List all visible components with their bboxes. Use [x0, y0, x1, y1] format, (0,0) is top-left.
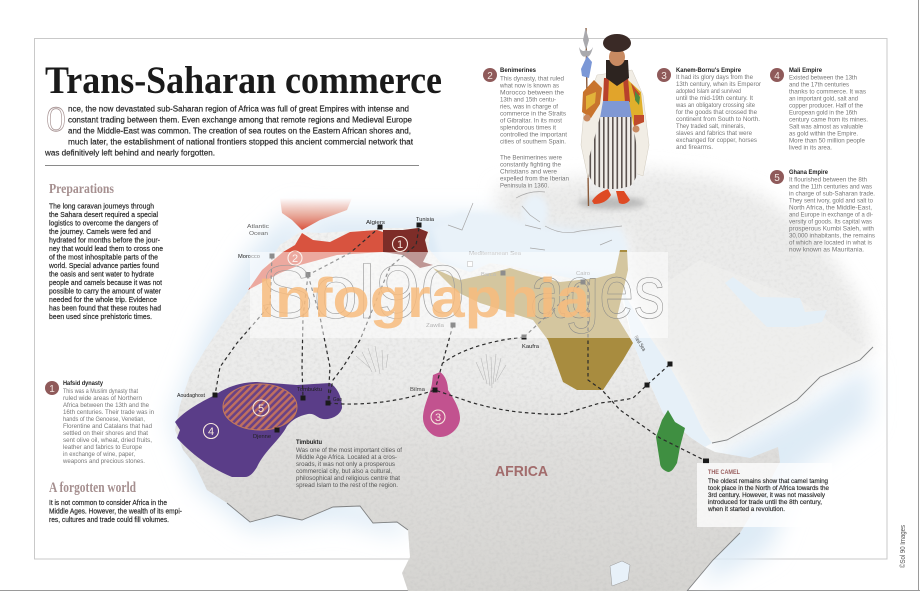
panel: preparations: world. Special advance parties found — [48, 261, 159, 270]
map labels: Morocco — [238, 254, 260, 260]
panel: Kanem-Bornu's Empire: slaves and fabrics that were — [676, 130, 753, 137]
panel: Benimerines: This dynasty, that ruled — [500, 75, 565, 82]
panel: Kanem-Bornu's Empire: continent from South to North. — [676, 116, 760, 123]
badge 1: 1 — [49, 384, 55, 395]
panel: Hafsid dynasty: weapons and precious stones. — [62, 458, 145, 465]
Spain in Benimerines territory — [280, 198, 352, 230]
panel: Timbuktu: Timbuktu — [296, 439, 322, 446]
panel: Benimerines: splendorous times it — [500, 124, 556, 131]
panel: Mali Empire: Salt was almost as valuable — [789, 124, 864, 130]
Persian Gulf — [725, 277, 827, 327]
panel: preparations — [48, 182, 163, 321]
continent label: AFRICA — [495, 463, 548, 480]
turban — [603, 34, 631, 52]
panel: Benimerines: Peninsula in 1360. — [500, 182, 549, 189]
panel: preparations: the Sahara desert required a special — [49, 210, 158, 219]
panel: Mali Empire: century came from its mines. — [789, 116, 868, 124]
map labels: Mediterranean Sea — [469, 251, 522, 257]
tassel — [581, 56, 592, 78]
intro paragraph: was definitively left behind and nearly forgotten. — [44, 148, 215, 158]
panel: Hafsid dynasty: This was a Muslim dynasty that — [63, 388, 138, 395]
panel: Ghana Empire: in charge of sub-Saharan trade. — [789, 191, 875, 198]
panel: Mali Empire: copper producer. Half of the — [789, 102, 864, 110]
panel: the camel: The oldest remains show that camel taming — [708, 478, 828, 485]
heading: A forgotten world — [49, 480, 136, 496]
panel: Mali Empire: More than 50 million people — [789, 138, 866, 144]
panel: the camel — [697, 463, 832, 527]
panel: Ghana Empire: and Europe in exchange of a di- — [789, 212, 873, 219]
Europe and Asia land — [497, 170, 873, 443]
panel: preparations: the journey. Camels were fed and — [49, 227, 151, 236]
panel: Benimerines: 13th and 15th centu- — [500, 96, 556, 103]
credit: ©Sol 90 Images — [899, 525, 907, 568]
panel: Ghana Empire: versity of goods. Its capital was — [789, 219, 872, 226]
panel: Hafsid dynasty: in exchange of wine, paper, — [63, 451, 135, 458]
panel: Hafsid dynasty: settled on their shores and that — [63, 430, 148, 437]
face — [609, 48, 625, 66]
sash — [600, 101, 632, 118]
Africa land — [175, 228, 780, 591]
panel: preparations: people and camels because it was not — [49, 278, 162, 287]
panel: Hafsid dynasty: Hafsid dynasty — [63, 380, 104, 387]
cloak — [581, 70, 649, 178]
panel: Kanem-Bornu's Empire: exchanged for copper, horses — [676, 137, 757, 144]
panel: Kanem-Bornu's Empire — [657, 67, 761, 151]
map of North Africa and Arabia — [170, 170, 873, 591]
map labels: Barca — [481, 272, 497, 278]
panel: Benimerines: Benimerines — [500, 67, 537, 74]
panel: a forgotten world: Middle Ages. However, the wealth of its empi- — [49, 506, 183, 516]
map labels: Atlantic — [247, 224, 269, 230]
panel: preparations: logistics to overcome the dangers of — [49, 218, 158, 228]
panel: Benimerines: what now is known as — [499, 82, 559, 89]
coastlines — [227, 347, 873, 591]
map number badges: 1 — [397, 239, 403, 251]
map labels: Aoudaghost — [177, 393, 205, 399]
panel: Hafsid dynasty: sent olive oil, wheat, dried fruits, — [63, 437, 152, 444]
hand right — [632, 126, 640, 132]
badge 2: 2 — [487, 71, 493, 82]
map labels: Bilma — [410, 387, 426, 393]
panel: Ghana Empire: and the 11th centuries and was — [789, 184, 872, 191]
drop cap: O — [46, 99, 66, 139]
region 6: Egypt tan area — [433, 250, 633, 390]
intro paragraph — [44, 99, 414, 158]
panel: the camel: when it started a revolution. — [707, 506, 785, 513]
panel: Timbuktu: Was one of the most important cities of — [296, 447, 402, 454]
watermark — [258, 250, 665, 334]
badge 4: 4 — [774, 71, 780, 82]
Arabia relief texture — [497, 170, 873, 443]
panel: Kanem-Bornu's Empire: Kanem-Bornu's Empire — [676, 67, 742, 74]
panel: Benimerines: controlled the important — [500, 131, 567, 138]
heading: Preparations — [49, 182, 114, 197]
map number badges — [204, 236, 445, 438]
striped trousers — [588, 117, 638, 189]
title: Trans-Saharan commerce — [45, 59, 442, 102]
panel: Ghana Empire: now known as Mauritania. — [789, 247, 864, 254]
panel: a forgotten world: It is not common to consider Africa in the — [49, 498, 167, 507]
panel: Benimerines: cities of southern Spain. — [500, 138, 566, 145]
intro paragraph: and the Middle-East was common. The creation of sea routes on the Eastern African shores and, — [68, 126, 411, 136]
ground shadow — [578, 197, 646, 209]
panel: preparations: needed for the whole trip. Evidence — [49, 295, 157, 304]
panel: Kanem-Bornu's Empire: and firearms. — [676, 144, 713, 151]
panel: preparations: of the most inhospitable parts of the — [49, 252, 158, 262]
watermark: Infographia — [258, 266, 591, 329]
panel: Mali Empire: Existed between the 13th — [789, 74, 858, 82]
map labels: Tombuktu — [297, 387, 322, 393]
region 3: Kanem-Bornu — [423, 372, 460, 437]
panel: Kanem-Bornu's Empire: It had its glory days from the — [676, 74, 754, 81]
panel: preparations: The long caravan journeys through — [49, 202, 154, 210]
Tibesti and Ahaggar relief — [356, 346, 506, 388]
panel: Timbuktu: sroads, it was not only a prosperous — [296, 461, 395, 468]
panel: Mali Empire: European gold in the 16th — [789, 110, 858, 116]
panel: a forgotten world — [49, 480, 183, 524]
badge 3: 3 — [661, 71, 667, 82]
Red Sea — [622, 290, 712, 447]
panel: Timbuktu: commercial city, but also a cultural, — [296, 468, 392, 475]
panel: Ghana Empire — [770, 169, 875, 254]
panel: Timbuktu: philosophical and religious centre that — [296, 475, 400, 482]
panel: Mali Empire: lived in its area. — [789, 144, 832, 152]
map labels — [177, 217, 647, 440]
panel: Kanem-Bornu's Empire: adopted Islam and survived — [676, 88, 741, 95]
panel: Ghana Empire: Ghana Empire — [789, 169, 829, 176]
panel: Benimerines: Morocco between the — [500, 89, 565, 96]
map labels: Cairo — [576, 271, 590, 277]
panel: preparations: been used since prehistoric times. — [49, 312, 152, 321]
intro paragraph: constant trading between them. Even exchange among that remote regions and Medieval Europe — [68, 116, 413, 124]
city markers — [212, 222, 709, 464]
panel: Hafsid dynasty — [45, 380, 155, 465]
panel: Benimerines: constantly fighting the — [500, 161, 562, 168]
panel: Kanem-Bornu's Empire: They traded salt, minerals, — [676, 123, 745, 130]
region 1: Hafsid dynasty — [383, 228, 433, 268]
map labels: Red Sea — [632, 335, 647, 353]
left sleeve — [582, 80, 602, 118]
panel: Timbuktu: spread Islam to the rest of the region. — [296, 482, 398, 489]
panel: Benimerines: expelled from the Iberian — [500, 175, 570, 182]
Mediterranean fringe — [432, 212, 628, 275]
Lake Victoria — [610, 561, 630, 586]
panel: Ghana Empire: 30,000 inhabitants, the remains — [789, 233, 875, 240]
shoes — [592, 189, 630, 204]
panel: Benimerines: commerce in the Straits — [500, 110, 566, 117]
panel: Hafsid dynasty: Florentine and Catalans that had — [63, 423, 153, 430]
map labels: Tunisia — [416, 217, 435, 223]
sea glow — [170, 205, 870, 585]
panel: Kanem-Bornu's Empire: until the mid-19th century. It — [676, 95, 753, 102]
Africa relief texture — [175, 228, 780, 591]
panel: Mali Empire: Mali Empire — [789, 67, 823, 74]
map labels: Algiers — [366, 220, 385, 226]
panel: preparations: has been found that these routes had — [49, 304, 161, 312]
panel: Hafsid dynasty: ruled wide areas of Northern — [63, 395, 143, 402]
panel: Benimerines: ries, was in charge of — [500, 103, 558, 110]
panel: Timbuktu — [296, 439, 402, 489]
right sleeve — [628, 80, 644, 126]
panel: Mali Empire: as gold within the Empire. — [789, 130, 858, 138]
region 4: Mali Empire — [175, 382, 342, 477]
trade routes — [215, 227, 706, 461]
panel: Hafsid dynasty: leather and fabrics to Europe — [63, 444, 143, 451]
panel: a forgotten world: res, cultures and trade could fill volumes. — [49, 515, 169, 524]
Arabia crisp fill — [640, 260, 860, 443]
map labels: Ocean — [249, 231, 268, 237]
hands — [584, 114, 590, 122]
panel: Benimerines: Christians and were — [500, 168, 558, 175]
panel: Hafsid dynasty: 16th centuries. Their trade was in — [63, 409, 155, 416]
figure: Saharan merchant — [578, 28, 649, 209]
Mediterranean coasts — [448, 192, 622, 250]
map number badges: 3 — [435, 412, 441, 424]
panel: Timbuktu: Middle Age Africa. Located at a cros- — [296, 454, 397, 461]
region 2: Benimerines — [248, 230, 383, 290]
panel: preparations: ney that would lead them to cross one — [49, 244, 163, 253]
region 5: Ghana Empire — [223, 384, 297, 430]
watermark: ages — [530, 250, 665, 334]
panel: the camel: 3rd century. However, it was not massively — [708, 492, 826, 499]
panel: the camel: took place in the North of Africa towards the — [708, 485, 829, 492]
region 7: Ethiopia — [656, 410, 685, 472]
intro paragraph: much later, the establishment of national frontiers stopped this ancient commercial network that — [68, 138, 414, 146]
map number badges: 5 — [258, 403, 264, 415]
panel: Ghana Empire: They sent ivory, gold and salt to — [789, 198, 874, 205]
Aegean — [522, 195, 548, 229]
panel: Mali Empire: and the 17th centuries — [789, 82, 849, 88]
panel: Ghana Empire: North Africa, the Middle-East, — [789, 205, 872, 212]
panel: Hafsid dynasty: Africa between the 13th and the — [63, 402, 150, 409]
panel: Ghana Empire: prosperous Kumbi Saleh, with — [789, 226, 875, 233]
panel: Kanem-Bornu's Empire: 13th century, when its Emperor — [676, 81, 761, 88]
map labels: Kaufra — [522, 344, 540, 350]
panel: preparations: the oasis and sent water to hydrate — [49, 270, 154, 278]
watermark: Sol90 — [260, 250, 465, 334]
map number badges: 2 — [292, 253, 298, 265]
panel: the camel: introduced for trade until the 8th century, — [708, 499, 822, 506]
map number badges: 4 — [208, 426, 214, 438]
panel: Ghana Empire: of which are located in what is — [789, 240, 872, 247]
panel: preparations: hydrated for months before the jour- — [49, 236, 161, 244]
panel: Benimerines: The Benimerines were — [500, 154, 563, 161]
panel: Benimerines: of Gibraltar. In its most — [500, 117, 562, 124]
badge 5: 5 — [774, 173, 780, 184]
panel: Mali Empire: thanks to commerce. It was — [789, 88, 866, 96]
panel: Mali Empire: an important gold, salt and — [789, 96, 859, 102]
map labels: Gao — [333, 397, 342, 403]
spear — [586, 28, 588, 206]
panel: Kanem-Bornu's Empire: for the goods that crossed the — [676, 109, 758, 116]
vest — [603, 78, 630, 102]
beard — [606, 60, 629, 86]
panel: Kanem-Bornu's Empire: was an obligatory crossing site — [675, 102, 756, 109]
intro paragraph: nce, the now devastated sub-Saharan region of Africa was full of great Empires with intense and — [68, 104, 409, 114]
map labels: Djenne — [253, 434, 271, 440]
panel: the camel: THE CAMEL — [708, 469, 740, 476]
panel: Mali Empire — [770, 67, 868, 152]
panel: Hafsid dynasty: hands of the Genoese, Venetian, — [63, 416, 145, 423]
panel: Ghana Empire: It flourished between the 8th — [789, 177, 868, 184]
panel: Benimerines — [483, 67, 570, 189]
map labels: Zawila — [426, 323, 445, 329]
panel: preparations: possible to carry the amount of water — [49, 286, 162, 296]
